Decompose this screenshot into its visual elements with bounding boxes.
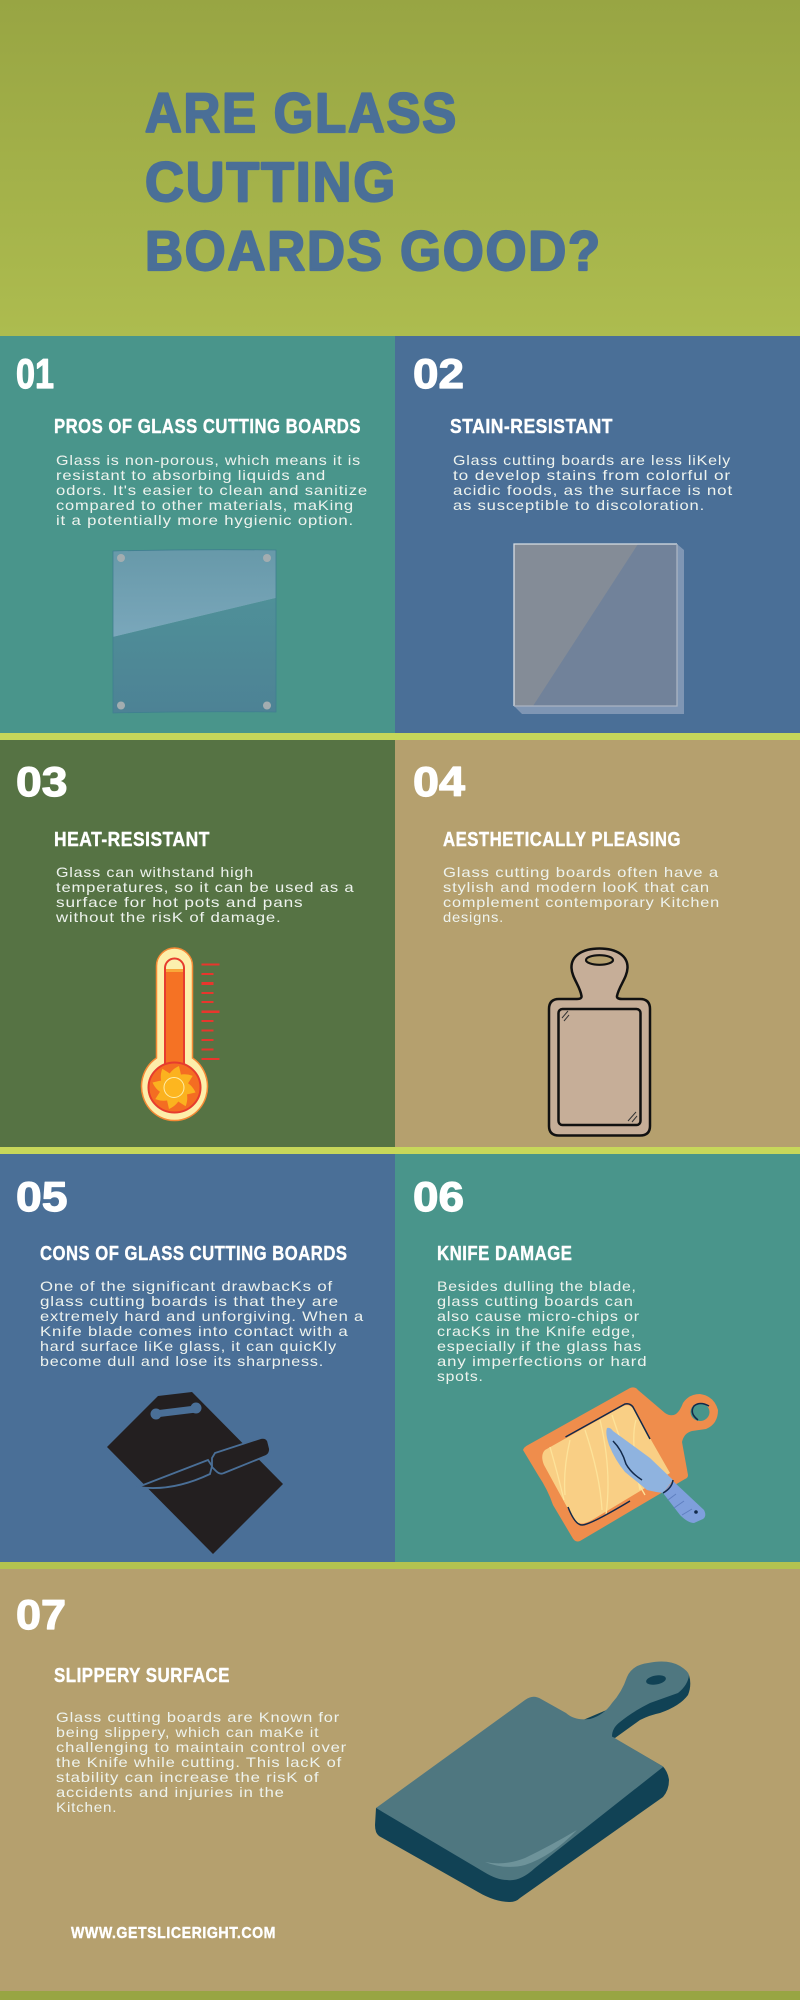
heading: knife damage: KNIFE DAMAGE [437, 1243, 572, 1265]
body text: stain-resistant [453, 452, 733, 513]
number 06: 06 [413, 1173, 464, 1220]
icon: black board with knife [107, 1392, 283, 1554]
heading: heat-resistant: HEAT-RESISTANT [54, 829, 210, 851]
body text: heat-resistant [55, 864, 355, 925]
body text: heat-resistant: without the risK of damage. [55, 909, 282, 925]
heading: aesthetically pleasing: AESTHETICALLY PLEASING [443, 829, 681, 851]
body text: cons: Knife blade comes into contact with a [40, 1323, 348, 1339]
body text: knife damage: also cause micro-chips or [437, 1308, 640, 1324]
panel: 04 aesthetically pleasing [395, 740, 800, 1147]
heading: slippery surface: SLIPPERY SURFACE [54, 1665, 230, 1687]
body text: pros [56, 452, 368, 528]
body text: aesthetically pleasing: designs. [443, 909, 504, 925]
body text: knife damage [437, 1278, 647, 1384]
body text: cons: extremely hard and unforgiving. When a [40, 1308, 364, 1324]
body text: pros: Glass is non-porous, which means it is [56, 452, 361, 468]
body text: stain-resistant: to develop stains from colorful or [453, 467, 731, 483]
body text: slippery surface: stability can increase the risK of [56, 1769, 319, 1785]
panel: 05 cons of glass cutting boards [0, 1154, 395, 1562]
number 07: 07 [16, 1591, 66, 1638]
panel: 06 knife damage [395, 1154, 800, 1562]
title: CUTTING [145, 150, 397, 213]
body text: knife damage: glass cutting boards can [437, 1293, 634, 1309]
header panel [0, 0, 800, 336]
divider band 1 [0, 733, 800, 740]
panel: 03 heat-resistant [0, 740, 395, 1147]
title: ARE GLASS [145, 81, 458, 144]
icon: outlined cutting board [549, 948, 650, 1136]
body text: cons: hard surface liKe glass, it can quicKly [40, 1338, 337, 1354]
divider band 2 [0, 1147, 800, 1154]
number 03: 03 [16, 758, 68, 805]
body text: heat-resistant: surface for hot pots and pans [56, 894, 304, 910]
body text: knife damage: any imperfections or hard [437, 1353, 647, 1369]
body text: aesthetically pleasing: Glass cutting boards often have a [443, 864, 719, 880]
icon: teal cutting board [375, 1662, 690, 1902]
icon: glass panel with screws [113, 550, 276, 713]
body text: aesthetically pleasing: complement contemporary Kitchen [443, 894, 720, 910]
body text: slippery surface: accidents and injuries in the [56, 1784, 285, 1800]
bottom band [0, 1991, 800, 2000]
body text: stain-resistant: acidic foods, as the surface is not [453, 482, 733, 498]
body text: knife damage: especially if the glass has [437, 1338, 642, 1354]
number 04: 04 [413, 758, 466, 805]
panel: 02 stain-resistant [395, 336, 800, 733]
body text: cons: glass cutting boards is that they are [40, 1293, 339, 1309]
body text: cons: One of the significant drawbacKs of [40, 1278, 333, 1294]
icon: orange board with blue knife [523, 1387, 718, 1542]
body text: stain-resistant: as susceptible to discoloration. [453, 497, 705, 513]
body text: pros: resistant to absorbing liquids and [56, 467, 326, 483]
body text: slippery surface: Glass cutting boards are Known for [56, 1709, 340, 1725]
body text: knife damage: cracKs in the Knife edge, [437, 1323, 636, 1339]
heading: pros: PROS OF GLASS CUTTING BOARDS [54, 416, 361, 438]
divider band 3 [0, 1562, 800, 1569]
body text: slippery surface: being slippery, which can maKe it [56, 1724, 319, 1740]
icon: square glass pane [514, 544, 684, 714]
body text: slippery surface: the Knife while cutting. This lacK of [56, 1754, 342, 1770]
body text: aesthetically pleasing [443, 864, 720, 925]
body text: slippery surface [56, 1709, 347, 1815]
panel: 07 slippery surface [0, 1569, 800, 1991]
icon: thermometer with sun [142, 948, 220, 1120]
body text: aesthetically pleasing: stylish and modern looK that can [443, 879, 710, 895]
body text: stain-resistant: Glass cutting boards are less liKely [453, 452, 731, 468]
number 01: 01 [16, 350, 54, 397]
body text: cons: become dull and lose its sharpness. [40, 1353, 324, 1369]
body text: pros: it a potentially more hygienic option. [56, 512, 354, 528]
panel: 01 pros of glass cutting boards [0, 336, 395, 733]
body text: heat-resistant: Glass can withstand high [56, 864, 254, 880]
body text: cons [40, 1278, 364, 1369]
website url: WWW.GETSLICERIGHT.COM [71, 1925, 276, 1942]
body text: knife damage: spots. [437, 1368, 484, 1384]
body text: knife damage: Besides dulling the blade, [437, 1278, 637, 1294]
title [145, 81, 602, 282]
heading: stain-resistant: STAIN-RESISTANT [450, 416, 613, 438]
body text: pros: odors. It's easier to clean and sanitize [56, 482, 368, 498]
heading: cons: CONS OF GLASS CUTTING BOARDS [40, 1243, 348, 1265]
body text: slippery surface: challenging to maintain control over [56, 1739, 347, 1755]
body text: slippery surface: Kitchen. [56, 1799, 117, 1815]
title: BOARDS GOOD? [145, 219, 602, 282]
number 02: 02 [413, 350, 464, 397]
number 05: 05 [16, 1173, 68, 1220]
body text: pros: compared to other materials, maKing [56, 497, 354, 513]
body text: heat-resistant: temperatures, so it can be used as a [56, 879, 354, 895]
